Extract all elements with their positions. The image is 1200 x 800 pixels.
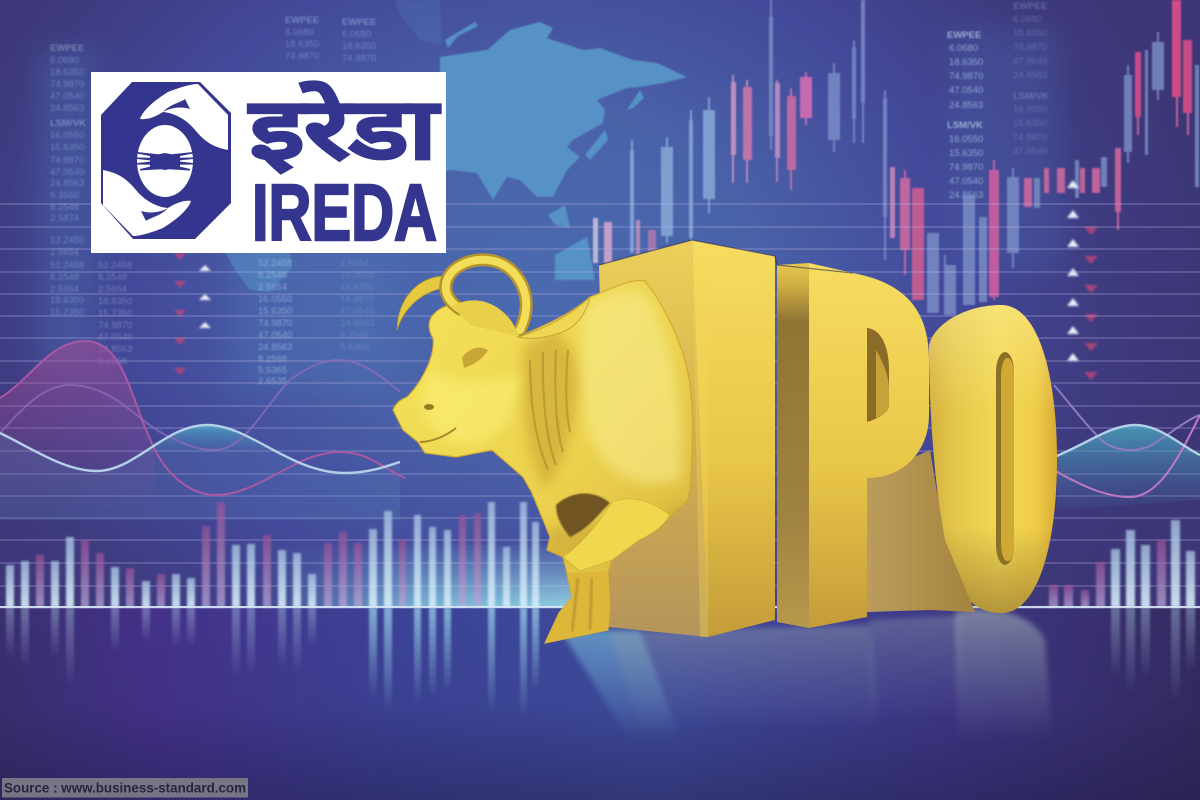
ticker columns left: 18.6350 [285,39,319,50]
ticker columns left: 2.5654 [50,284,79,295]
ticker columns centre: 15.6350 [258,306,292,317]
letter P [777,263,929,628]
ticker columns right: 18.6350 [949,57,983,68]
ticker columns left: 74.9870 [342,53,376,64]
world map silhouette [225,0,687,292]
ticker columns left: 47.0540 [98,332,132,343]
ticker columns centre: 2.6535 [258,376,287,387]
ticker columns left: 15.2350 [98,308,132,319]
ticker columns centre: 5.5365 [340,342,369,353]
ticker columns left: 15.6350 [50,142,84,153]
ticker columns left: LSM/VK [50,118,86,129]
ticker columns left [50,15,376,367]
ticker columns right: 74.9870 [1013,42,1047,53]
bull horns and ear [397,260,590,338]
candlestick chart [593,0,1199,315]
bull hind leg [545,571,610,643]
bull raised leg [563,499,670,571]
ticker columns right: 15.6350 [1013,118,1047,129]
horizontal grid lines [0,204,1200,586]
ticker columns left: 18.6350 [342,41,376,52]
ticker columns right: 74.9870 [949,71,983,82]
ticker columns left: 2.5654 [98,284,127,295]
ticker columns centre [258,258,374,387]
ticker columns left: 74.9870 [50,155,84,166]
lower hand [103,170,191,236]
area fill under wave right [1057,425,1200,510]
logo IREDA wordmark: IREDA [252,168,437,257]
ticker columns right: 24.8563 [949,190,983,201]
ticker columns right: LSM/VK [1013,91,1049,102]
ticker columns left: 47.0540 [50,167,84,178]
ticker columns centre: 8.2568 [340,330,369,341]
ticker columns left: 16.0550 [50,130,84,141]
ticker columns left: 74.9870 [285,51,319,62]
ticker columns left: EWPEE [285,15,319,26]
ticker columns centre: 2.5654 [340,258,369,269]
area fills under waves left [0,341,400,520]
ticker columns right: 47.0540 [949,176,983,187]
bull body [393,281,693,643]
ticker columns right: 18.6350 [1013,28,1047,39]
IREDA logo panel [91,72,446,257]
ticker columns centre: 24.8563 [340,318,374,329]
ticker columns right [947,1,1049,201]
ticker columns left: 8.2548 [50,202,79,213]
ticker columns left: 47.0540 [50,91,84,102]
ticker columns left: 6.0680 [342,29,371,40]
ticker columns centre: 52.2458 [258,258,292,269]
upper thumb [163,99,190,112]
ticker columns centre: 8.2568 [258,354,287,365]
ticker columns left: 13.2450 [50,235,84,246]
triangle and heart markers [174,180,1098,380]
ticker columns centre: 47.0540 [340,306,374,317]
baseline of chart [0,606,1200,608]
bull shading [420,290,690,560]
lower thumb [141,208,168,221]
ticker columns centre: 16.0550 [258,294,292,305]
upper hand [140,84,228,150]
ticker columns centre: 2.5654 [258,282,287,293]
ticker columns left: 18.6350 [50,295,84,306]
ticker columns left: 52.2458 [98,260,132,271]
letter O [929,305,1057,613]
ticker columns left: 2.5654 [50,247,79,258]
source credit: Source : www.business-standard.com [4,780,246,796]
ticker columns right: 74.9870 [949,162,983,173]
ticker columns left: 8.2548 [98,272,127,283]
ticker columns left: 8.2568 [98,356,127,367]
glow behind ticker columns [38,30,1060,390]
ticker columns left: 6.3560 [50,190,79,201]
logo Hindi wordmark: इरेडा [247,81,441,176]
ticker columns right: 74.9870 [1013,132,1047,143]
ticker columns right: 15.6350 [949,148,983,159]
ticker columns left: 24.8563 [50,178,84,189]
reflection of bull and IPO letters [560,609,1052,740]
ticker columns centre: 16.0550 [340,270,374,281]
ticker columns left: 2.5874 [50,213,79,224]
ticker columns right: 47.0540 [1013,56,1047,67]
ticker columns left: 74.9870 [98,320,132,331]
ticker columns left: 24.8563 [98,344,132,355]
ticker columns right: 24.8563 [1013,70,1047,81]
ticker columns right: 16.0550 [1013,104,1047,115]
ticker columns centre: 5.5365 [258,365,287,376]
ticker columns right: EWPEE [947,30,981,41]
ticker columns centre: 74.9870 [258,318,292,329]
shadow under P bowl [867,450,975,612]
ticker columns left: 18.6350 [98,296,132,307]
ticker columns right: 24.8563 [949,100,983,111]
golden bull [393,260,693,643]
ticker columns centre: 15.6350 [340,282,374,293]
ticker columns left: 15.2350 [50,307,84,318]
ticker columns centre: 74.9870 [340,294,374,305]
wave chart left [0,341,405,495]
ticker columns right: 16.0550 [949,134,983,145]
bull belly gap [556,493,610,537]
ticker columns left: 18.6350 [50,67,84,78]
logo emblem: central woven symbol [137,152,193,170]
wave chart right [1054,385,1200,497]
ticker columns left: 8.2548 [50,272,79,283]
ticker columns left: 6.0680 [50,55,79,66]
floor: dark reflective surface [0,607,1200,800]
ticker columns right: 6.0680 [1013,14,1042,25]
bar chart right [1049,520,1195,607]
ticker columns right: 6.0680 [949,43,978,54]
ticker columns left: 24.8563 [50,103,84,114]
ticker columns centre: 47.0540 [258,330,292,341]
ticker columns right: 47.0540 [1013,146,1047,157]
bar reflections on floor [6,608,1195,718]
bull face details [420,348,488,442]
letter I [599,240,853,637]
cyan glow at chart base [260,545,580,607]
logo emblem: octagon with two hands [101,82,231,239]
ticker columns right: 47.0540 [949,85,983,96]
ticker columns left: 52.2458 [50,260,84,271]
ticker columns centre: 24.8563 [258,342,292,353]
background: blue-purple gradient [0,0,1200,608]
ticker columns left: 6.0680 [285,27,314,38]
ticker columns left: EWPEE [342,17,376,28]
IPO 3D letters [599,240,1057,637]
bull hind leg streaks [572,578,592,632]
ticker columns centre: 8.2548 [258,270,287,281]
ticker columns right: EWPEE [1013,1,1047,12]
ticker columns left: 74.9870 [50,79,84,90]
bar chart left [6,502,539,607]
ticker columns right: LSM/VK [947,120,983,131]
ticker columns left: EWPEE [50,43,84,54]
